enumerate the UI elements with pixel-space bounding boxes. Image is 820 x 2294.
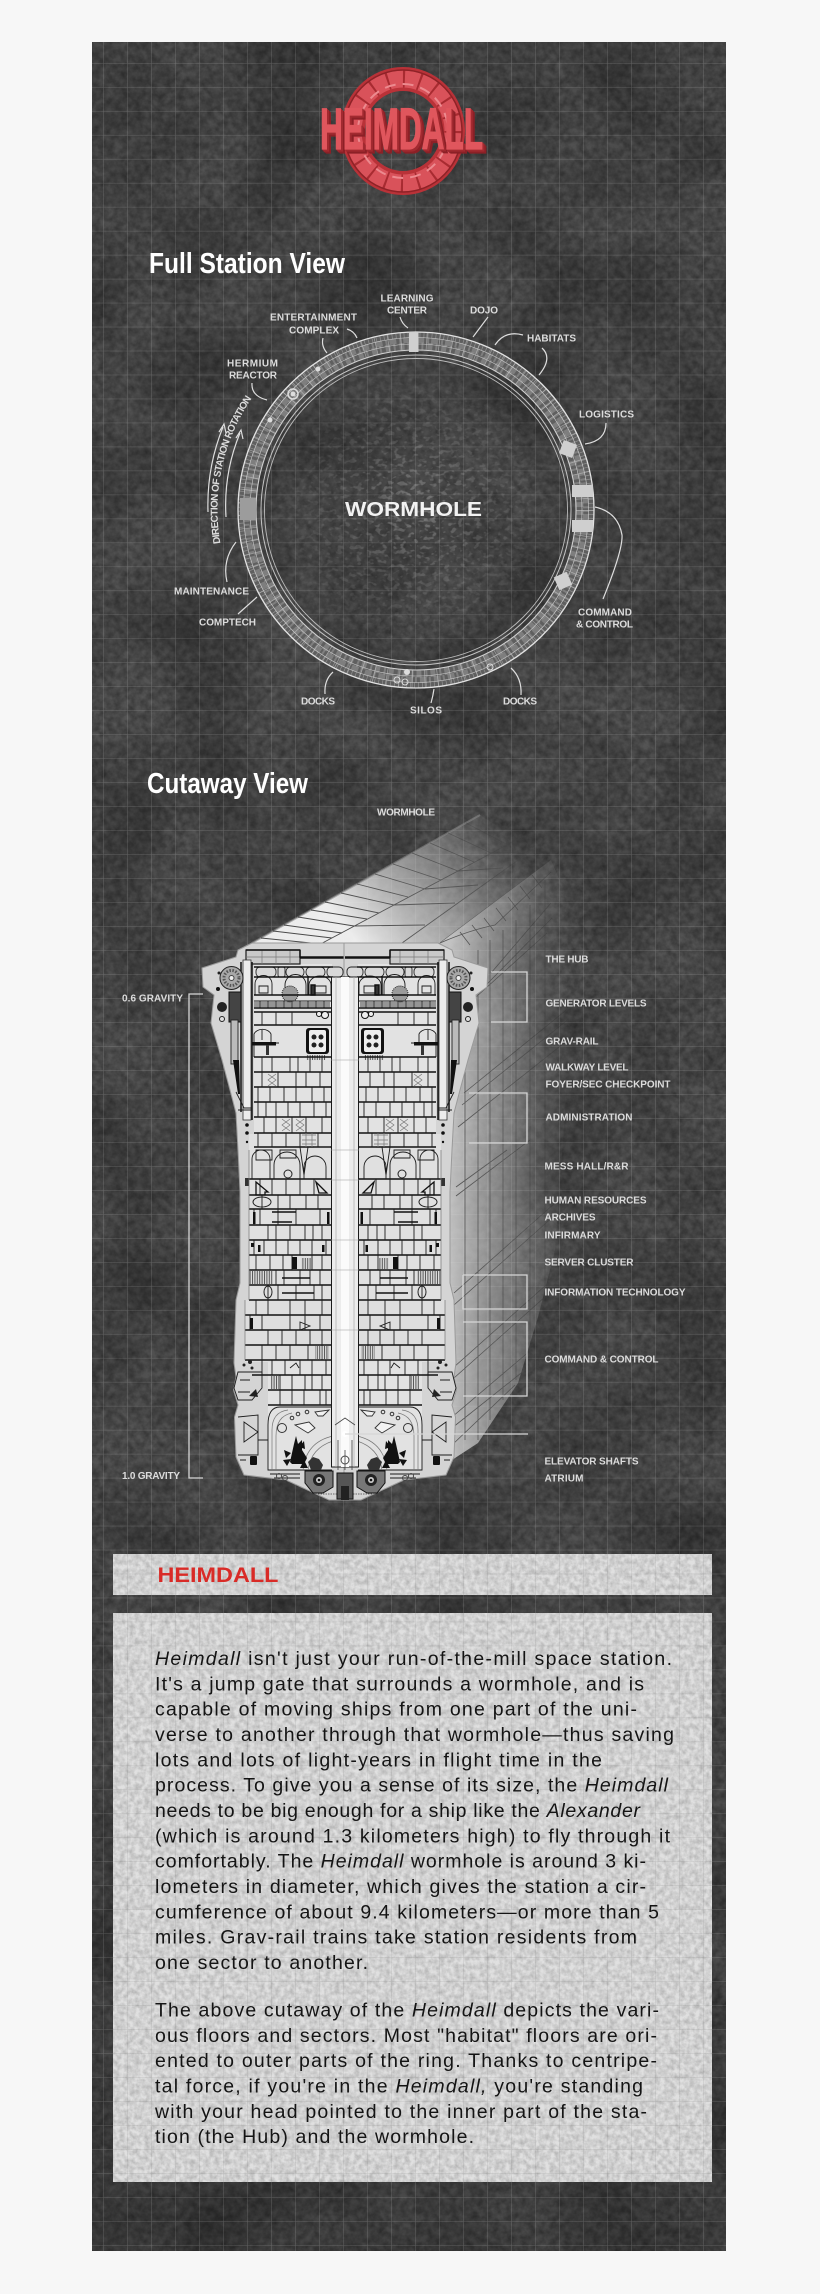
label: habitats: HABITATS <box>527 334 576 345</box>
paragraph 1: (which is around 1.3 kilometers high) to fly through it <box>155 1825 671 1847</box>
bracket: command and control <box>463 1322 527 1396</box>
logo ring <box>344 70 462 192</box>
paragraph 1: capable of moving ships from one part of the uni- <box>155 1699 637 1721</box>
paragraph 1: one sector to another. <box>155 1952 368 1974</box>
paragraph 2: tion (the Hub) and the wormhole. <box>155 2126 474 2148</box>
bracket: administration <box>469 1093 527 1143</box>
label: command and control <box>576 507 633 631</box>
paragraph 2: ous floors and sectors. Most "habitat" floors are ori- <box>155 2025 657 2047</box>
label: docks left <box>301 672 335 708</box>
sector labels: WALKWAY LEVEL <box>546 1062 628 1074</box>
wormhole interior <box>265 359 567 661</box>
sector labels: FOYER/SEC CHECKPOINT <box>546 1080 670 1090</box>
heading: Full Station View: Full Station View <box>149 248 345 280</box>
sector labels: INFORMATION TECHNOLOGY <box>544 1288 686 1298</box>
label: comptech: COMPTECH <box>199 618 256 629</box>
diagram: full station ring <box>174 294 634 717</box>
sector labels <box>544 954 686 1484</box>
paragraph 1: Heimdall isn't just your run-of-the-mill space station. <box>155 1648 672 1670</box>
label: logistics: LOGISTICS <box>579 410 634 421</box>
arrow: rotation inner <box>226 430 243 517</box>
paragraph 1: needs to be big enough for a ship like the Alexander <box>155 1800 642 1822</box>
bracket: gravity scale <box>189 994 203 1478</box>
cross-section hull left half <box>202 943 346 1500</box>
sector labels: THE HUB <box>546 954 588 966</box>
label: silos <box>410 689 442 717</box>
paragraph 1: verse to another through that wormhole—thus saving <box>155 1724 674 1746</box>
sector labels: GRAV-RAIL <box>546 1036 598 1048</box>
label: learning center: LEARNING <box>380 294 434 305</box>
ring detail circles <box>268 366 493 685</box>
leader line: atrium <box>345 1433 528 1435</box>
paragraph 1 <box>155 1648 674 1974</box>
label: hermium reactor: HERMIUM <box>227 359 278 370</box>
sector labels: INFIRMARY <box>544 1230 601 1242</box>
label: hermium reactor: REACTOR <box>229 371 278 382</box>
paragraph 2: ented to outer parts of the ring. Thanks to centripe- <box>155 2050 657 2072</box>
paragraph 1: miles. Grav-rail trains take station residents from <box>155 1927 637 1949</box>
paragraph 1: comfortably. The Heimdall wormhole is around 3 ki- <box>155 1851 646 1873</box>
label: 1.0 gravity: 1.0 GRAVITY <box>122 1471 180 1482</box>
paragraph 2: with your head pointed to the inner part of the sta- <box>154 2101 647 2123</box>
station ring band <box>238 332 594 688</box>
label: learning center <box>380 294 434 328</box>
label: maintenance: MAINTENANCE <box>174 587 249 598</box>
receding side surface <box>440 860 572 1460</box>
sector labels: GENERATOR LEVELS <box>546 998 647 1010</box>
paragraph 2: tal force, if you're in the Heimdall, you're standing <box>155 2076 643 2098</box>
label: entertainment complex <box>270 313 357 353</box>
bracket: generator levels <box>491 972 527 1022</box>
label: dojo <box>470 306 498 337</box>
logo: Heimdall ring and wordmark <box>320 70 483 192</box>
bracket: information technology <box>463 1275 527 1309</box>
label: entertainment complex: ENTERTAINMENT <box>270 313 357 324</box>
sector labels: HUMAN RESOURCES <box>544 1196 647 1206</box>
label: direction of station rotation: DIRECTION OF STATION ROTATION <box>210 395 252 544</box>
paragraph 1: process. To give you a sense of its size, the Heimdall <box>155 1775 669 1797</box>
panel: dark textured blueprint background <box>92 42 726 2251</box>
label: logistics <box>579 410 634 444</box>
label: entertainment complex: COMPLEX <box>289 326 339 337</box>
label: docks right: DOCKS <box>503 697 537 708</box>
label: wormhole: WORMHOLE <box>345 499 482 521</box>
heading: Cutaway View: Cutaway View <box>147 768 308 800</box>
label: learning center: CENTER <box>387 306 428 317</box>
text box: article body <box>113 1613 712 2182</box>
label: habitats <box>495 334 576 375</box>
sector labels: MESS HALL/R&R <box>544 1162 629 1172</box>
label: docks left: DOCKS <box>301 697 335 708</box>
label: command and control: & CONTROL <box>576 620 633 631</box>
label: dojo: DOJO <box>470 306 498 317</box>
label: comptech <box>199 597 257 629</box>
paragraph 1: lots and lots of light-years in flight time in the <box>155 1749 602 1771</box>
label: maintenance <box>174 542 249 598</box>
sector labels: ELEVATOR SHAFTS <box>544 1456 639 1468</box>
label: wormhole above cutaway: WORMHOLE <box>377 808 435 818</box>
paragraph 2 <box>154 2000 659 2148</box>
arrow: rotation outer <box>208 424 226 512</box>
header box: Heimdall: HEIMDALL <box>158 1564 279 1587</box>
sector labels: ATRIUM <box>544 1474 584 1484</box>
header box: Heimdall <box>113 1554 712 1595</box>
label: hermium reactor <box>227 359 278 400</box>
sector labels: ADMINISTRATION <box>546 1112 632 1124</box>
sector labels: ARCHIVES <box>544 1212 596 1224</box>
cross-section hull right half <box>344 943 488 1500</box>
sector labels: COMMAND & CONTROL <box>544 1354 658 1366</box>
central corridor <box>331 977 359 1500</box>
paragraph 2: The above cutaway of the Heimdall depicts the vari- <box>155 2000 659 2022</box>
ring highlighted sectors <box>240 332 593 590</box>
logo wordmark: HEIMDALL <box>320 97 483 162</box>
label: docks right <box>503 668 537 708</box>
sector labels: SERVER CLUSTER <box>544 1258 634 1268</box>
label: 0.6 gravity: 0.6 GRAVITY <box>122 994 183 1004</box>
paragraph 1: cumference of about 9.4 kilometers—or more than 5 <box>155 1901 659 1923</box>
receding top surface <box>252 815 551 948</box>
label: command and control: COMMAND <box>578 608 632 619</box>
paragraph 1: lometers in diameter, which gives the station a cir- <box>155 1876 646 1898</box>
paragraph 1: It's a jump gate that surrounds a wormhole, and is <box>155 1673 644 1695</box>
diagram: cutaway cross-section <box>122 815 686 1500</box>
label: silos: SILOS <box>410 706 442 717</box>
